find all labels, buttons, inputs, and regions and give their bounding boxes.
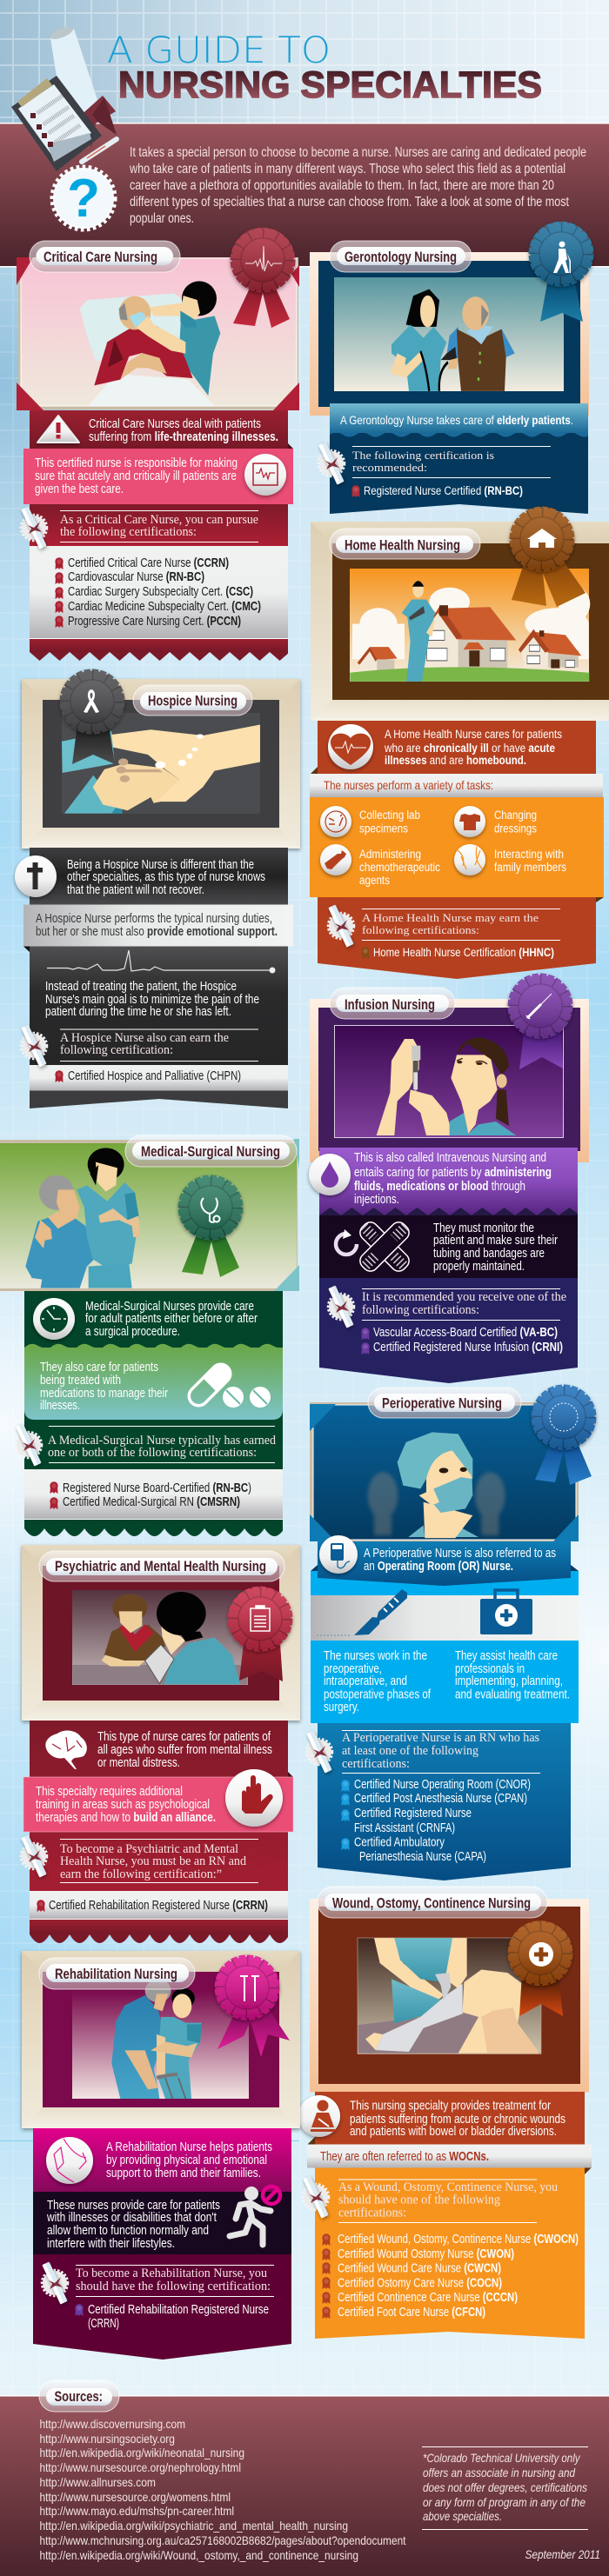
text: definition: or mental distress. [97, 1756, 180, 1770]
banner background [23, 848, 293, 1108]
task: administering chemotherapeutic agents: agents [359, 874, 390, 887]
icon: stop hand [225, 1769, 283, 1827]
text: assisting professionals [455, 1649, 570, 1702]
text: certification intro: A Medical-Surgical Nurse typically has earned [48, 1434, 277, 1448]
picture frame [22, 1951, 300, 2128]
text: pain management [45, 980, 259, 1019]
icon: certificate scroll [21, 1024, 47, 1068]
icon: warning triangle [37, 416, 79, 443]
text: pain management: Instead of treating the patient, the Hospice [45, 980, 237, 994]
certification list: Certified Hospice and Palliative (CHPN) [68, 1069, 241, 1083]
text: definition [97, 1730, 272, 1770]
icon: bandage and refresh [336, 1219, 412, 1275]
panel: Gerontology Nursing [310, 222, 593, 514]
certification list: Certified Registered Nurse Infusion (CRNI) [373, 1341, 563, 1355]
text: monitoring: tubing and bandages are [433, 1247, 545, 1261]
certification list: Certified Foot Care Nurse (CFCN) [338, 2306, 485, 2320]
text: definition: Medical-Surgical Nurses provide care [85, 1300, 254, 1314]
text: tasks heading: The nurses perform a variety of tasks: [324, 778, 493, 792]
text: definition: support to them and their families. [106, 2167, 261, 2180]
certification list: Home Health Nurse Certification (HHNC) [373, 946, 554, 959]
certification list: Certified Rehabilitation Registered Nurse [88, 2303, 269, 2317]
certification list: Certified Wound Ostomy Nurse (CWON) [338, 2247, 514, 2261]
title pill [125, 1135, 297, 1167]
icon: certificate scroll [328, 904, 354, 948]
banner background [330, 403, 588, 514]
text: definition: This type of nurse cares for patients of [97, 1730, 271, 1744]
title pill: Perioperative Nursing [382, 1395, 502, 1412]
certification list: Cardiovascular Nurse (RN-BC) [68, 570, 204, 584]
text: definition: for adult patients either before or after [85, 1312, 258, 1326]
illustration: nurse preparing syringe [377, 1037, 516, 1135]
sources pill [39, 2380, 119, 2412]
text: certification intro [342, 1730, 540, 1774]
task: administering chemotherapeutic agents: chemotherapeutic [359, 861, 440, 874]
text: pain management: Nurse's main goal is to minimize the pain of the [45, 993, 259, 1007]
title pill [368, 1388, 521, 1418]
sources list: http://www.mchnursing.org.au/ca257168002B8682/pages/about?opendocument [40, 2533, 406, 2547]
certification list: Certified Ostomy Care Nurse (COCN) [338, 2276, 502, 2290]
text: definition: and patients with bowel or bladder diversions. [350, 2125, 557, 2139]
illustration: surgical nurse with mask [368, 1432, 505, 1538]
ribbon badge: house [510, 507, 586, 607]
sources list: http://www.discovernursing.com [40, 2417, 185, 2431]
title pill: Critical Care Nursing [44, 249, 157, 265]
icon: IV bag [319, 1535, 358, 1574]
title pill: Infusion Nursing [345, 996, 435, 1013]
icon: brain [45, 1731, 87, 1769]
text: responsibility: This certified nurse is responsible for making [35, 456, 238, 470]
text: definition: all ages who suffer from mental illness [97, 1743, 272, 1757]
footer band [0, 2395, 609, 2576]
title: A GUIDE TO [107, 29, 331, 71]
certification list: Perianesthesia Nurse (CAPA) [359, 1850, 486, 1864]
certification list: Certified Medical-Surgical RN (CMSRN) [63, 1495, 240, 1509]
text: certification intro: earn the following certification:” [60, 1867, 222, 1881]
illustration: nurse with elderly patient [390, 290, 515, 391]
text: definition: that the patient will not recover. [67, 883, 204, 897]
certification list [50, 1481, 251, 1509]
disclaimer: above specialties. [423, 2509, 502, 2523]
task: collecting lab specimens: specimens [359, 822, 408, 835]
text: certification intro: A Home Health Nurse may earn the [362, 911, 539, 924]
certification list [55, 556, 261, 629]
icon: clipboard [11, 76, 102, 171]
task: interacting with family members: family members [494, 861, 566, 874]
text: monitoring: properly maintained. [433, 1260, 525, 1274]
banner background [23, 1721, 293, 1943]
sources list: http://www.nursesource.org/nephrology.html [40, 2460, 241, 2474]
sources list: http://www.nursesource.org/womens.html [40, 2490, 231, 2504]
disclaimer [422, 2446, 588, 2530]
certification list: Registered Nurse Board-Certified (RN-BC) [63, 1481, 251, 1495]
text: disabilities [46, 2199, 220, 2251]
text: certification intro [60, 510, 258, 542]
text: definition: Critical Care Nurses deal with patients [89, 417, 261, 431]
text: assisting professionals: professionals in [455, 1662, 525, 1676]
text: medications: They also care for patients [40, 1361, 158, 1375]
icon: certificate scroll [306, 1730, 332, 1774]
text: definition: by providing physical and emotional [106, 2153, 267, 2167]
title pill [133, 685, 252, 716]
picture frame [22, 1545, 300, 1721]
header artwork: scroll, clipboard and thermometer [11, 24, 117, 171]
certification list: Certified Nurse Operating Room (CNOR) [354, 1778, 531, 1792]
text: disabilities: allow them to function normally and [47, 2224, 209, 2238]
text: certification intro [362, 1288, 566, 1321]
text: definition: a surgical procedure. [85, 1325, 180, 1339]
text: definition [89, 417, 278, 444]
text: definition [67, 858, 265, 897]
ribbon badge: crutches [215, 1955, 290, 2057]
text: definition: patients suffering from acute or chronic wounds [350, 2113, 566, 2127]
text: certification intro: The following certification is [352, 449, 494, 462]
icon: certificate scroll [16, 1423, 42, 1467]
text: emotional support: but her or she must also provide emotional support. [36, 925, 278, 939]
banner background [24, 1291, 283, 1536]
text: certification intro: To become a Psychiatric and Mental [60, 1842, 238, 1856]
icon: question mark seal: ? [67, 169, 100, 229]
picture frame [310, 252, 589, 416]
icon: clock [33, 1298, 75, 1340]
title pill: Home Health Nursing [345, 537, 460, 553]
text: definition: fluids, medications or blood through [354, 1180, 525, 1194]
panel: Hospice Nursing [15, 669, 300, 1108]
picture frame [0, 1139, 299, 1291]
text: additional training: therapies and how to build an alliance. [36, 1811, 216, 1825]
title pill: Wound, Ostomy, Continence Nursing [332, 1895, 531, 1911]
text: certification intro: As a Critical Care Nurse, you can pursue [60, 513, 258, 527]
text: definition: suffering from life-threatening illnesses. [89, 430, 278, 444]
text: certification intro [362, 909, 560, 941]
icon: certificate scroll [328, 1285, 354, 1328]
certification list [341, 1778, 531, 1864]
illustration: nurse listening to patient [72, 1592, 248, 1685]
text: emotional support: A Hospice Nurse performs the typical nursing duties, [36, 912, 272, 926]
text: monitoring: patient and make sure their [433, 1234, 558, 1248]
icon: certificate scroll [318, 442, 345, 485]
task: interacting with family members [454, 844, 566, 875]
panel: Medical-Surgical Nursing [0, 1135, 299, 1536]
certification list: Certified Wound Care Nurse (CWCN) [338, 2262, 501, 2276]
certification list: Certified Continence Care Nurse (CCCN) [338, 2291, 518, 2305]
text: definition: an Operating Room (OR) Nurse. [364, 1560, 513, 1574]
sources list: http://en.wikipedia.org/wiki/Wound,_ostomy,_and_continence_nursing [40, 2548, 358, 2562]
text: definition: This nursing specialty provides treatment for [350, 2099, 551, 2113]
text: responsibility: sure that acutely and critically ill patients are [35, 469, 237, 483]
text: certification intro: A Perioperative Nurse is an RN who has [342, 1731, 539, 1745]
title pill [330, 529, 480, 559]
text: definition: illnesses and are homebound. [385, 754, 526, 767]
text: assisting professionals: They assist health care [455, 1649, 558, 1663]
text: certification intro: A Hospice Nurse also can earn the [60, 1031, 229, 1045]
icon: certificate scroll [21, 506, 47, 549]
panel: Home Health Nursing [310, 507, 609, 979]
illustration: nurse in front of houses [350, 569, 590, 682]
panel: Wound, Ostomy, Continence Nursing [298, 1887, 592, 2339]
picture frame [310, 1899, 589, 2092]
ribbon badge: stethoscope [178, 1175, 243, 1277]
text: disabilities: interfere with their lifestyles. [47, 2237, 175, 2251]
text: certification intro: Health Nurse, you must be an RN and [60, 1854, 247, 1868]
text: WOCNs: They are often referred to as WOCNs. [320, 2150, 489, 2164]
text: medications [40, 1361, 168, 1413]
title pill [330, 241, 472, 272]
ribbon badge: clipboard [228, 1587, 292, 1681]
title pill [330, 988, 455, 1019]
task: changing dressings [454, 806, 537, 837]
text: emotional support [36, 912, 278, 939]
icon: monitor [244, 454, 286, 496]
illustration: nurse wrapping leg [358, 1938, 541, 2053]
illustration: holding hands [62, 725, 260, 814]
text: definition: A Home Health Nurse cares for patients [385, 728, 562, 741]
banner background [311, 1541, 579, 1880]
sources pill: Sources: [54, 2388, 103, 2405]
sources list: http://www.nursingsociety.org [40, 2432, 175, 2446]
icon: question mark seal [52, 167, 115, 230]
text: responsibility: given the best care. [35, 483, 124, 496]
sources list: http://www.mayo.edu/mshs/pn-career.html [40, 2504, 234, 2518]
text: certification intro: certifications: [338, 2207, 406, 2220]
text: certification intro: following certifications: [362, 1303, 479, 1317]
text: certification intro [60, 1029, 258, 1062]
text: certification intro: should have the following certification: [76, 2280, 271, 2293]
disclaimer: *Colorado Technical University only [423, 2451, 580, 2465]
text: definition [350, 2099, 566, 2139]
sources list [40, 2417, 406, 2562]
icon: capsule and tablets [184, 1359, 271, 1410]
icon: certificate scroll [42, 2261, 68, 2305]
picture frame [17, 257, 299, 410]
certification list: Vascular Access-Board Certified (VA-BC) [373, 1326, 558, 1340]
task: administering chemotherapeutic agents [320, 844, 440, 887]
icon: thermometer [82, 139, 117, 162]
text: monitoring [433, 1221, 558, 1274]
task: collecting lab specimens: Collecting lab [359, 809, 420, 822]
sources list: http://en.wikipedia.org/wiki/psychiatric_and_mental_health_nursing [40, 2519, 348, 2533]
icon: medical bag [480, 1590, 532, 1634]
ribbon badge: syringe [508, 974, 572, 1069]
icon: scalpel [317, 1589, 407, 1635]
text: definition [364, 1547, 556, 1574]
text: work phases: intraoperative, and [324, 1674, 407, 1688]
text: certification intro: certifications: [342, 1757, 410, 1771]
title pill [318, 1887, 547, 1918]
icon: person with wound [298, 2095, 340, 2137]
ribbon badge: blue rosette [532, 1385, 596, 1485]
text: additional training [36, 1785, 216, 1825]
text: disabilities: with illnesses or disabilities that don't [46, 2211, 217, 2225]
panel: Critical Care Nursing [17, 228, 299, 661]
banner background [23, 410, 293, 661]
text: work phases: The nurses work in the [324, 1649, 427, 1663]
certification list: Certified Post Anesthesia Nurse (CPAN) [354, 1792, 527, 1806]
certification list: Certified Rehabilitation Registered Nurse (CRRN) [49, 1899, 268, 1913]
text: certification intro: As a Wound, Ostomy, Continence Nurse, you [338, 2180, 558, 2194]
certification list: First Assistant (CRNFA) [354, 1821, 455, 1835]
task: interacting with family members: Interacting with [494, 848, 564, 861]
title pill [30, 241, 180, 272]
certification list: Progressive Care Nursing Cert. (PCCN) [68, 615, 241, 629]
icon: drop [309, 1154, 351, 1195]
certification list: Certified Registered Nurse [354, 1807, 472, 1821]
certification list: Cardiac Medicine Subspecialty Cert. (CMC) [68, 600, 261, 614]
icon: cross [15, 855, 57, 897]
illustration: nurse helping patient with walker [111, 1980, 202, 2099]
certification list: Certified Ambulatory [354, 1836, 445, 1850]
text: pain management: patient during the time he or she has left. [45, 1005, 231, 1019]
banner background [310, 721, 604, 979]
text: certification intro: at least one of the following [342, 1744, 478, 1758]
certification list [75, 2303, 269, 2331]
text: definition: Being a Hospice Nurse is different than the [67, 858, 254, 872]
text: assisting professionals: and evaluating treatment. [455, 1688, 570, 1702]
text: definition: A Rehabilitation Nurse helps patients [106, 2140, 272, 2154]
picture frame [310, 1402, 579, 1541]
panel: Perioperative Nursing [306, 1385, 596, 1880]
text: certification intro [48, 1426, 277, 1463]
text: definition [106, 2140, 272, 2180]
task: changing dressings: dressings [494, 822, 537, 835]
banner background [319, 1148, 578, 1383]
text: additional training: This specialty requires additional [36, 1785, 183, 1799]
text: medications: being treated with [40, 1374, 121, 1388]
disclaimer: offers an associate in nursing and [423, 2466, 576, 2479]
banner background [307, 2092, 592, 2339]
text: definition: This is also called Intravenous Nursing and [354, 1151, 546, 1165]
task: changing dressings: Changing [494, 809, 537, 822]
text: disabilities: These nurses provide care for patients [47, 2199, 220, 2213]
illustration: nurse comforting elderly patient [25, 1148, 140, 1288]
text: work phases: postoperative phases of [324, 1688, 432, 1702]
text: work phases [324, 1649, 432, 1714]
text: work phases: surgery. [324, 1701, 359, 1714]
text: definition: A Perioperative Nurse is also referred to as [364, 1547, 556, 1561]
text: responsibility [35, 456, 238, 496]
text: certification intro: the following certifications: [60, 525, 197, 539]
text: monitoring: They must monitor the [433, 1221, 534, 1235]
panel: Rehabilitation Nursing [22, 1951, 300, 2360]
picture frame [310, 999, 589, 1162]
task: collecting lab specimens [320, 806, 420, 837]
header band [0, 123, 609, 268]
title pill [39, 1551, 284, 1581]
text: medications: medications to manage their [40, 1387, 168, 1401]
text: certification intro: following certification: [60, 1043, 173, 1057]
picture frame [311, 522, 609, 721]
text: definition [354, 1151, 552, 1207]
icon: runner with prohibition sign [230, 2187, 280, 2245]
icon: certificate scroll [21, 1834, 47, 1878]
certification list: Cardiac Surgery Subspecialty Cert. (CSC) [68, 585, 253, 599]
text: definition: A Gerontology Nurse takes care of elderly patients. [340, 414, 573, 427]
text: certification intro [352, 446, 551, 478]
text: assisting professionals: implementing, planning, [455, 1674, 563, 1688]
text: certification intro [76, 2265, 274, 2297]
title pill: Rehabilitation Nursing [55, 1966, 177, 1982]
ribbon badge: awareness ribbon [60, 669, 124, 764]
certification list: (CRRN) [88, 2317, 119, 2331]
title: NURSING SPECIALTIES [118, 64, 542, 106]
text: certification intro: should have one of the following [338, 2193, 500, 2207]
text: certification intro [60, 1839, 258, 1883]
title pill: Medical-Surgical Nursing [141, 1143, 280, 1160]
icon: rolled scroll [49, 24, 117, 148]
certification list: Certified Critical Care Nurse (CCRN) [68, 556, 229, 570]
certification list: Registered Nurse Certified (RN-BC) [364, 484, 523, 497]
intro paragraph [129, 145, 586, 226]
sources list: http://en.wikipedia.org/wiki/neonatal_nursing [40, 2446, 244, 2460]
text: definition: other specialties, as this type of nurse knows [67, 870, 265, 884]
text: definition: injections. [354, 1193, 399, 1207]
sources list: http://www.allnurses.com [40, 2475, 156, 2489]
picture frame [22, 679, 300, 849]
illustration: nurse adjusting patient oxygen mask [80, 281, 220, 406]
icon: heart [328, 724, 373, 769]
text: certification intro: one or both of the following certifications: [48, 1446, 257, 1460]
icon: certificate scroll [303, 2175, 329, 2219]
ribbon badge: walking person [529, 222, 593, 322]
text: certification intro: recommended: [352, 461, 427, 474]
text: certification intro: following certifications: [362, 923, 479, 936]
text: certification intro: It is recommended you receive one of the [362, 1290, 566, 1304]
title pill: Psychiatric and Mental Health Nursing [55, 1558, 266, 1574]
text: certification intro [338, 2179, 558, 2223]
text: definition [85, 1300, 258, 1339]
panel: Infusion Nursing [309, 974, 589, 1383]
ribbon badge: medical cross [508, 1921, 572, 2016]
certification list [322, 2233, 579, 2320]
chart: heartbeat line [47, 950, 275, 974]
icon: hands [46, 2137, 93, 2184]
title pill: Gerontology Nursing [345, 249, 457, 265]
text: work phases: preoperative, [324, 1662, 382, 1676]
panel: Psychiatric and Mental Health Nursing [21, 1545, 300, 1943]
title [107, 29, 542, 106]
text: certification intro: To become a Rehabilitation Nurse, you [76, 2266, 267, 2280]
text: definition [384, 728, 562, 767]
title pill [39, 1958, 195, 1989]
text: definition: entails caring for patients by administering [354, 1166, 552, 1180]
title pill: Hospice Nursing [148, 692, 238, 709]
text: additional training: training in areas such as psychological [36, 1798, 210, 1812]
certification list: Certified Wound, Ostomy, Continence Nurse (CWOCN) [338, 2233, 579, 2247]
certification list [361, 1326, 563, 1355]
banner background [33, 2128, 291, 2360]
ribbon badge: heartbeat [231, 228, 295, 328]
task: administering chemotherapeutic agents: Administering [359, 848, 421, 861]
intro paragraph: popular ones. [130, 211, 194, 226]
text: definition: who are chronically ill or have acute [384, 742, 555, 755]
text: medications: illnesses. [40, 1399, 80, 1413]
